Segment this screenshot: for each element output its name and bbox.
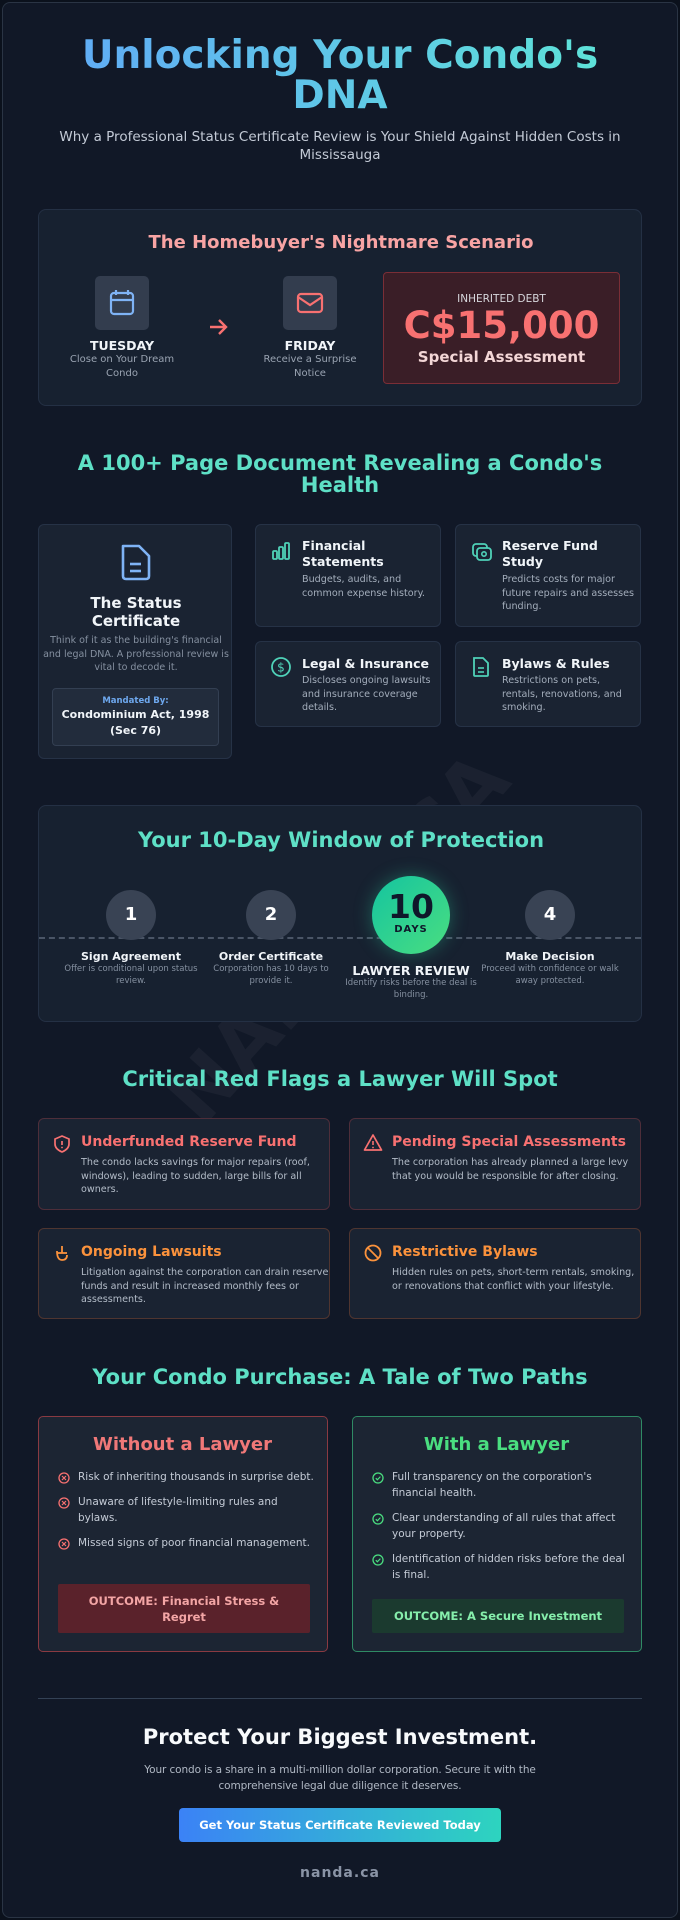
step 3: lawyer review: 10 [388, 887, 434, 926]
step 1: Sign Agreement [81, 950, 181, 963]
heading: nightmare: The Homebuyer's Nightmare Scenario [148, 232, 533, 253]
step: tuesday: TUESDAY [90, 338, 154, 353]
heading: 100+ page document [78, 451, 602, 497]
step 3: lawyer review: Identify risks before the deal is binding. [345, 978, 477, 1000]
watermark: NANDA.CA [149, 736, 527, 1141]
step 4: Proceed with confidence or walk away protected. [481, 964, 619, 986]
subtitle [59, 129, 621, 163]
step: friday [263, 276, 357, 379]
list: benefits [372, 1471, 625, 1581]
icon: camera/safe [472, 543, 492, 561]
card: pending special assessments: Pending Special Assessments [392, 1134, 626, 1150]
step 1: 1 [125, 904, 137, 925]
step 2: 2 [265, 904, 277, 925]
icon: dollar circle: $ [277, 660, 285, 674]
mandated box: (Sec 76) [110, 724, 161, 737]
subtitle: Mississauga [300, 147, 380, 163]
step 4: 4 [544, 904, 556, 925]
step: tuesday: Close on Your Dream [70, 354, 174, 365]
card: underfunded reserve: Underfunded Reserve Fund [81, 1134, 297, 1150]
card: reserve fund study: Study [502, 554, 543, 569]
outcome: secure [372, 1599, 624, 1633]
outcome: stress [58, 1584, 310, 1633]
callout: inherited debt: C$15,000 [404, 304, 599, 347]
heading: protect investment: Protect Your Biggest Investment. [143, 1725, 537, 1749]
heading: 100+ page document: A 100+ Page Document Revealing a Condo's [78, 451, 602, 475]
timeline line [39, 937, 641, 939]
card: underfunded reserve: The condo lacks savings for major repairs (roof, windows), leading to sudden, large bills for all owners. [81, 1157, 310, 1195]
card: legal & insurance [255, 641, 441, 727]
callout: inherited debt [383, 272, 620, 384]
subtitle: Why a Professional Status Certificate Review is Your Shield Against Hidden Costs in [59, 129, 621, 145]
step 2: Corporation has 10 days to provide it. [213, 964, 329, 986]
heading: two paths: Your Condo Purchase: A Tale of Two Paths [92, 1365, 588, 1389]
card: bylaws & rules: Restrictions on pets, rentals, renovations, and smoking. [502, 675, 622, 713]
list: risks: Missed signs of poor financial management. [78, 1537, 310, 1549]
text: closing body [144, 1764, 536, 1792]
step: tuesday: Condo [106, 368, 138, 379]
button: CTA [179, 1808, 501, 1842]
card: restrictive bylaws [349, 1228, 641, 1319]
button: CTA: Get Your Status Certificate Reviewed Today [199, 1818, 481, 1832]
heading: red flags: Critical Red Flags a Lawyer Will Spot [122, 1067, 558, 1091]
list: benefits: Clear understanding of all rules that affect your property. [392, 1512, 615, 1540]
step: friday: Receive a Surprise [263, 354, 357, 365]
card: bylaws & rules [455, 641, 641, 727]
step 4 [481, 890, 619, 986]
list: benefits: Full transparency on the corporation's financial health. [392, 1471, 592, 1499]
card: reserve fund study: Reserve Fund [502, 538, 598, 553]
card: ongoing lawsuits [38, 1228, 330, 1319]
step 2: Order Certificate [219, 950, 323, 963]
card: financial statements: Statements [302, 554, 384, 569]
card: restrictive bylaws: Restrictive Bylaws [392, 1244, 538, 1260]
text: closing body: Your condo is a share in a multi-million dollar corporation. Secure it with the [144, 1764, 536, 1776]
step 4: Make Decision [505, 950, 595, 963]
card: status certificate [38, 524, 232, 759]
step 2 [213, 890, 329, 986]
icon: document [122, 544, 150, 580]
icon: bar chart [272, 542, 290, 560]
step 1: Offer is conditional upon status review. [64, 964, 198, 986]
title [0, 36, 680, 116]
card: pending special assessments: The corporation has already planned a large levy that you would be responsible for after closing. [392, 1157, 628, 1182]
outcome: secure: OUTCOME: A Secure Investment [394, 1609, 602, 1623]
card: pending special assessments [349, 1118, 641, 1210]
arrow [210, 319, 228, 335]
card: legal & insurance: Legal & Insurance [302, 656, 429, 671]
list: benefits: Identification of hidden risks before the deal is final. [392, 1553, 625, 1581]
heading: 10-day: Your 10-Day Window of Protection [138, 828, 544, 852]
card: reserve fund study: Predicts costs for major future repairs and assesses funding. [502, 574, 634, 612]
step 1 [64, 890, 198, 986]
heading: 100+ page document: Health [301, 473, 379, 497]
card: financial statements [255, 524, 441, 627]
list: risks [58, 1471, 314, 1550]
icon: shield [54, 1135, 70, 1153]
callout: inherited debt: Special Assessment [418, 348, 585, 366]
outcome: stress: Regret [162, 1610, 206, 1624]
card: financial statements: Financial [302, 538, 365, 553]
step 3: lawyer review: DAYS [394, 924, 428, 935]
title: DNA [292, 73, 388, 118]
panel: 10-day window [38, 805, 642, 1022]
card: restrictive bylaws: Hidden rules on pets, short-term rentals, smoking, or renovations that conflict with your lifestyle. [392, 1267, 634, 1292]
icon: gavel [56, 1246, 68, 1261]
card: status certificate: Certificate [92, 612, 180, 630]
card: bylaws & rules: Bylaws & Rules [502, 656, 610, 671]
step: tuesday [70, 276, 174, 379]
icon: warning [364, 1134, 382, 1151]
outcome: stress: OUTCOME: Financial Stress & [89, 1594, 279, 1608]
step 3: lawyer review [345, 868, 477, 1000]
panel: nightmare scenario [38, 209, 642, 406]
step: friday: Notice [294, 368, 326, 379]
footer: brand: nanda.ca [300, 1865, 380, 1881]
step 3: lawyer review: LAWYER REVIEW [352, 963, 470, 978]
icon: calendar [95, 276, 149, 330]
card: reserve fund study [455, 524, 641, 627]
list: risks: Unaware of lifestyle-limiting rules and bylaws. [78, 1496, 278, 1524]
card: status certificate: Think of it as the building's financial and legal DNA. A professional review is vital to decode it. [43, 635, 229, 673]
step: friday: FRIDAY [285, 338, 335, 353]
card: financial statements: Budgets, audits, and common expense history. [302, 574, 425, 598]
mandated box: Condominium Act, 1998 [62, 708, 209, 721]
list: risks: Risk of inheriting thousands in surprise debt. [78, 1471, 314, 1483]
title: Unlocking Your Condo's [82, 33, 598, 78]
callout: inherited debt: INHERITED DEBT [457, 293, 546, 305]
card: status certificate: The Status [90, 594, 182, 612]
panel: without a lawyer: Without a Lawyer [93, 1434, 272, 1455]
panel: without a lawyer [38, 1416, 328, 1652]
icon: envelope [283, 276, 337, 330]
card: legal & insurance: Discloses ongoing lawsuits and insurance coverage details. [302, 675, 430, 713]
panel: with a lawyer [352, 1416, 642, 1652]
icon: prohibited [364, 1244, 382, 1262]
text: closing body: comprehensive legal due diligence it deserves. [218, 1780, 462, 1792]
panel: with a lawyer: With a Lawyer [424, 1434, 569, 1455]
mandated box: Mandated By: [102, 696, 169, 706]
icon: file [473, 657, 489, 677]
card: ongoing lawsuits: Litigation against the corporation can drain reserve funds and result in increased monthly fees or assessments. [81, 1267, 328, 1305]
card: underfunded reserve [38, 1118, 330, 1210]
card: ongoing lawsuits: Ongoing Lawsuits [81, 1244, 222, 1260]
mandated box [52, 688, 219, 746]
icon: dollar circle [271, 657, 291, 677]
